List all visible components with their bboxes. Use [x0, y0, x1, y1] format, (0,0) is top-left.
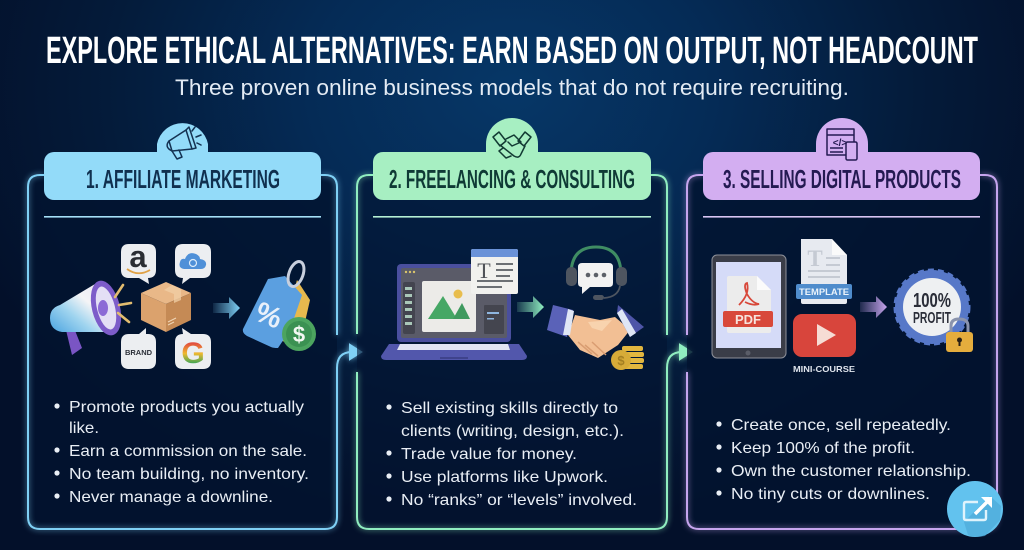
- illustration: support headset: [566, 247, 627, 300]
- illustration: handshake with coins: $: [617, 353, 625, 368]
- illustration: tablet with PDF: PDF: [735, 312, 761, 327]
- icon: share badge: [947, 481, 1003, 537]
- bullet list: affiliate: Earn a commission on the sale.: [69, 443, 307, 460]
- icon: handshake line badge: [486, 118, 538, 158]
- bullet list: affiliate: Promote products you actually: [69, 399, 304, 416]
- header: affiliate marketing: 1. AFFILIATE MARKETING: [86, 164, 280, 194]
- panel: freelancing and consulting: [357, 118, 691, 529]
- bullet list: digital products: Keep 100% of the profit.: [731, 440, 915, 457]
- panel: affiliate marketing: [28, 123, 361, 529]
- illustration: video mini-course: [793, 314, 856, 374]
- bullet list: affiliate: Never manage a downline.: [69, 489, 273, 506]
- illustration: template document: T: [807, 246, 823, 271]
- arrow: to client: [517, 296, 544, 318]
- bubble: google: G: [181, 337, 205, 370]
- illustration: text editor window: T: [477, 258, 491, 283]
- illustration: discount tag: %: [251, 296, 287, 336]
- bullet list: digital products: [716, 417, 971, 503]
- illustration: 100 percent profit badge with lock: [895, 270, 973, 352]
- icon: code window and phone badge: [816, 118, 868, 160]
- header: freelancing and consulting: 2. FREELANCING & CONSULTING: [389, 164, 635, 194]
- header: freelancing and consulting: [373, 152, 651, 200]
- bullet list: freelancing: [386, 400, 637, 509]
- panel outline and connector arrow: [357, 175, 691, 529]
- bubble: amazon: a: [129, 239, 147, 274]
- bullet list: digital products: Own the customer relationship.: [731, 463, 971, 480]
- bubble: cloud: [175, 244, 211, 284]
- bubble: brand: BRAND: [125, 348, 153, 357]
- illustration: template document: TEMPLATE: [799, 287, 849, 298]
- header: selling digital products: [703, 152, 980, 200]
- illustration: laptop: [381, 264, 527, 360]
- bullet list: freelancing: Sell existing skills directly to: [401, 400, 618, 417]
- bullet list: affiliate: like.: [69, 420, 99, 437]
- panel outline: [687, 175, 997, 529]
- bullet list: freelancing: Use platforms like Upwork.: [401, 469, 608, 486]
- illustration: discount tag: [243, 259, 316, 351]
- bullet list: freelancing: Trade value for money.: [401, 446, 577, 463]
- illustration: product box with brand bubbles: [121, 239, 211, 370]
- header: affiliate marketing: [44, 152, 321, 200]
- box: [141, 282, 191, 332]
- bullet list: affiliate: No team building, no inventory.: [69, 466, 309, 483]
- illustration: video mini-course: MINI-COURSE: [793, 364, 855, 374]
- bullet list: digital products: Create once, sell repeatedly.: [731, 417, 951, 434]
- illustration: discount tag: $: [293, 322, 305, 347]
- icon: code window and phone badge: </>: [833, 138, 847, 149]
- illustration: tablet with PDF: [712, 255, 786, 358]
- panel outline and connector arrow: [28, 175, 361, 529]
- panel: selling digital products: [687, 118, 997, 529]
- illustration: handshake with coins: [547, 305, 644, 370]
- bullet list: affiliate: [54, 399, 309, 506]
- illustration: megaphone: [50, 277, 131, 355]
- subtitle: Three proven online business models that do not require recruiting.: [175, 75, 849, 100]
- illustration: 100 percent profit badge with lock: PROFIT: [913, 310, 951, 327]
- arrow: to profit: [860, 296, 887, 318]
- illustration: text editor window: [471, 249, 518, 294]
- bullet list: digital products: No tiny cuts or downlines.: [731, 486, 930, 503]
- bullet list: freelancing: No “ranks” or “levels” involved.: [401, 492, 637, 509]
- illustration: template document: [796, 239, 852, 304]
- bullet list: freelancing: clients (writing, design, etc.).: [401, 423, 624, 440]
- icon: megaphone line badge: [157, 123, 208, 159]
- illustration: 100 percent profit badge with lock: 100%: [913, 290, 951, 312]
- arrow: to commission: [213, 297, 240, 319]
